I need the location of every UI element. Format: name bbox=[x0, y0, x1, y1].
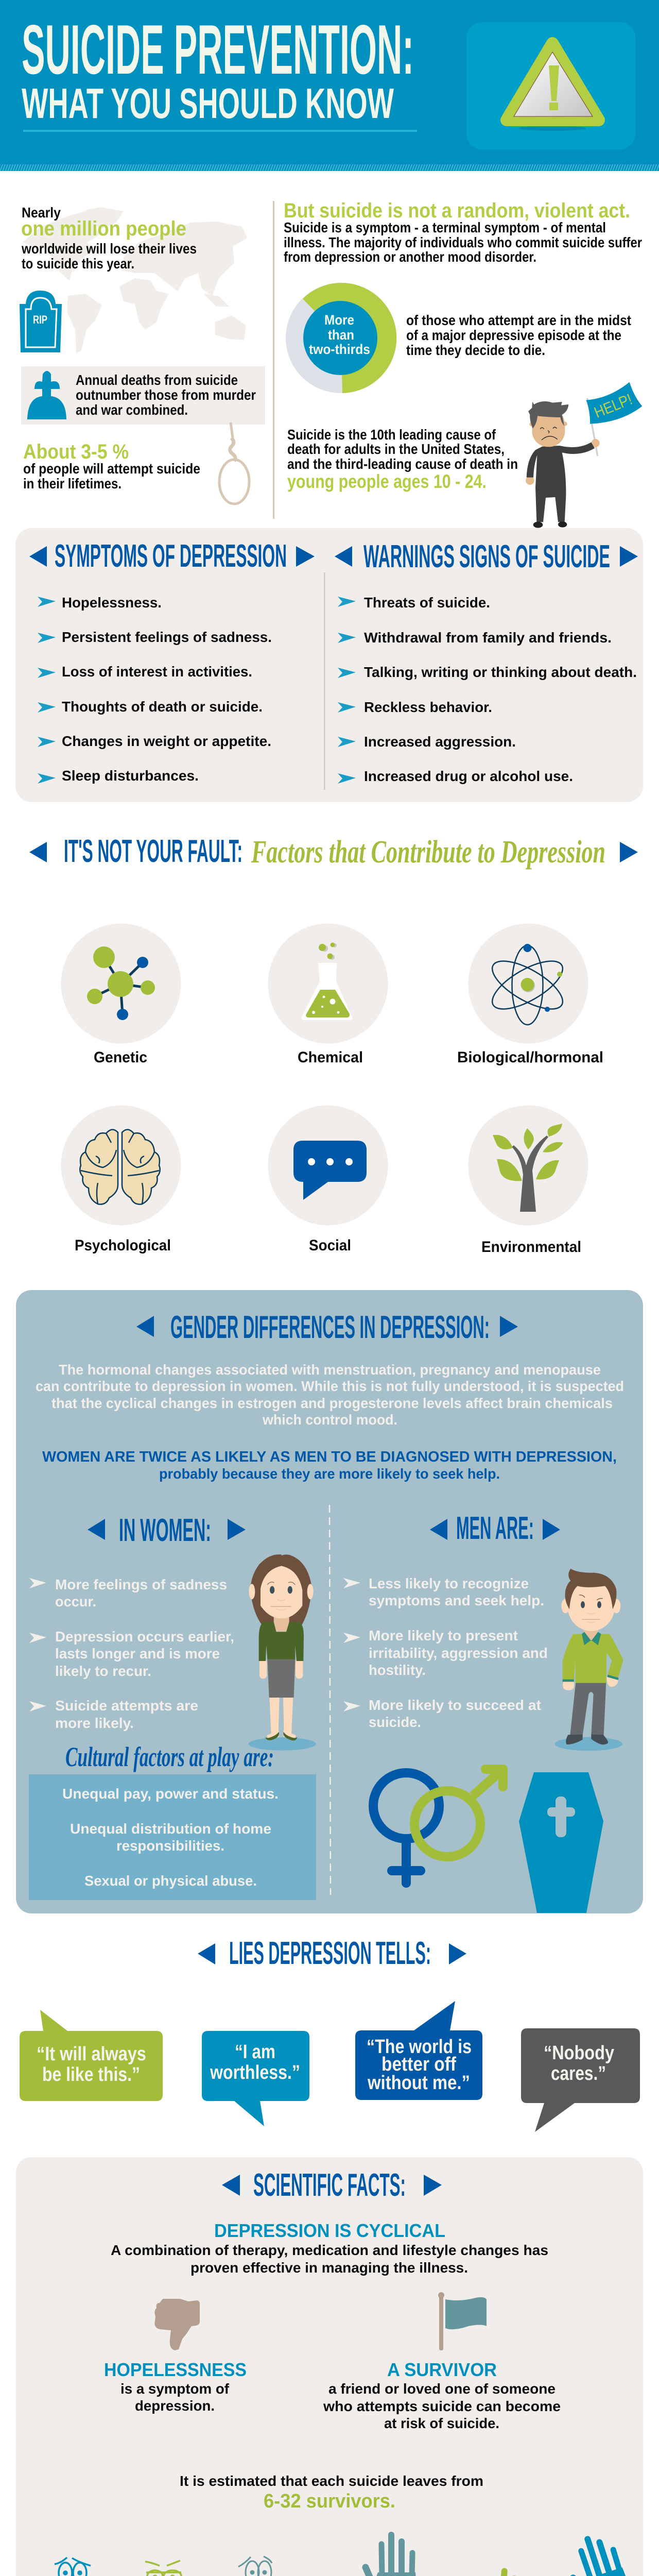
chart: donut more than two-thirds bbox=[286, 283, 396, 393]
text: of those who attempt: time they decide to die. bbox=[406, 342, 545, 358]
bubble: I am worthless: “I am bbox=[235, 2041, 275, 2063]
panel: symptoms and warning signs bbox=[15, 528, 643, 802]
bubble: it will always be like this: “It will always bbox=[37, 2043, 146, 2065]
icon: RIP tombstone: RIP bbox=[33, 313, 47, 326]
list: symptoms: Hopelessness. bbox=[62, 595, 162, 611]
text: hormonal changes: can contribute to depression in women. While this is not fully understood, it is suspected bbox=[36, 1378, 624, 1394]
box: cultural factors: Sexual or physical abuse. bbox=[84, 1873, 257, 1889]
text: about 3-5 percent: of people will attempt suicide bbox=[23, 461, 200, 477]
box: cultural factors: Unequal distribution of home bbox=[70, 1821, 271, 1837]
list: warning signs: Threats of suicide. bbox=[364, 595, 490, 611]
text: not a random act: from depression or another mood disorder. bbox=[284, 249, 536, 265]
factor: environmental bbox=[469, 1106, 588, 1256]
panel: scientific facts bbox=[16, 2157, 643, 2576]
title bbox=[22, 10, 417, 132]
list: symptoms: Thoughts of death or suicide. bbox=[62, 699, 263, 715]
header banner bbox=[0, 0, 659, 171]
icon: grave cross bbox=[27, 371, 66, 419]
factor: chemical bbox=[268, 923, 388, 1066]
text: a survivor bbox=[323, 2359, 561, 2431]
box: cultural factors: Unequal pay, power and status. bbox=[62, 1786, 279, 1802]
text: hopelessness: HOPELESSNESS bbox=[104, 2359, 247, 2380]
title: WHAT YOU SHOULD KNOW bbox=[22, 79, 394, 127]
list: in women: Suicide attempts are bbox=[55, 1698, 198, 1714]
heading: it's not your fault: IT'S NOT YOUR FAULT: bbox=[64, 834, 242, 869]
heading: scientific facts bbox=[222, 2167, 442, 2203]
list: in women: More feelings of sadness bbox=[55, 1577, 227, 1592]
text: hopelessness: is a symptom of bbox=[120, 2381, 230, 2397]
list: in women: occur. bbox=[55, 1594, 96, 1609]
heading: symptoms of depression bbox=[29, 538, 315, 574]
heading: symptoms of depression: SYMPTOMS OF DEPRESSION bbox=[55, 538, 287, 574]
bubble: the world is better off: without me.” bbox=[367, 2072, 470, 2094]
bubble: nobody cares bbox=[521, 2028, 640, 2132]
list: symptoms: Persistent feelings of sadness. bbox=[62, 629, 272, 645]
text: hormonal changes: which control mood. bbox=[262, 1412, 397, 1428]
list: symptoms bbox=[38, 595, 272, 784]
box: cultural factors: responsibilities. bbox=[116, 1838, 224, 1854]
text: depression is cyclical: DEPRESSION IS CYCLICAL bbox=[214, 2220, 445, 2241]
icon: RIP tombstone bbox=[20, 291, 62, 352]
list: men are: symptoms and seek help. bbox=[369, 1592, 544, 1608]
list: men are: More likely to present bbox=[369, 1628, 518, 1643]
text: 6-32 survivors: It is estimated that each suicide leaves from bbox=[180, 2473, 483, 2489]
text: of those who attempt: of a major depressive episode at the bbox=[406, 327, 621, 343]
list: men are: More likely to succeed at bbox=[369, 1697, 541, 1713]
list: warning signs: Increased drug or alcohol use. bbox=[364, 768, 573, 784]
factor: genetic: Genetic bbox=[94, 1049, 147, 1066]
text: one million people: to suicide this year. bbox=[22, 256, 134, 272]
factor: social: Social bbox=[309, 1237, 351, 1254]
list: men are: hostility. bbox=[369, 1662, 426, 1678]
illustration: man with help flag: HELP! bbox=[592, 391, 635, 421]
text: 10th leading cause: young people ages 10 - 24. bbox=[287, 471, 487, 492]
illustration: woman bbox=[249, 1554, 316, 1751]
chart: donut more than two-thirds: two-thirds bbox=[309, 342, 370, 357]
list: men are: irritability, aggression and bbox=[369, 1645, 548, 1661]
icon: brain bbox=[80, 1129, 160, 1205]
heading: men are: MEN ARE: bbox=[456, 1511, 534, 1546]
bubble: I am worthless: worthless.” bbox=[210, 2062, 300, 2083]
list: warning signs: Reckless behavior. bbox=[364, 699, 492, 715]
list: in women: likely to recur. bbox=[55, 1663, 151, 1679]
panel: annual deaths bbox=[21, 366, 265, 425]
heading: scientific facts: SCIENTIFIC FACTS: bbox=[253, 2167, 406, 2203]
text: about 3-5 percent: About 3-5 % bbox=[23, 440, 129, 463]
list: in women: lasts longer and is more bbox=[55, 1646, 220, 1662]
list: symptoms: Loss of interest in activities. bbox=[62, 664, 252, 680]
text: of those who attempt: of those who attempt are in the midst bbox=[406, 312, 631, 328]
panel: annual deaths: and war combined. bbox=[76, 402, 188, 418]
text: not a random act: Suicide is a symptom - a terminal symptom - of mental bbox=[284, 219, 606, 235]
factor: biological/hormonal bbox=[457, 923, 603, 1066]
factor: psychological: Psychological bbox=[75, 1237, 171, 1254]
text: women twice as likely bbox=[42, 1449, 617, 1482]
icon: coffin bbox=[519, 1772, 603, 1913]
list: in women: Depression occurs earlier, bbox=[55, 1629, 234, 1645]
text: of those who attempt bbox=[406, 312, 631, 358]
list: warning signs: Talking, writing or thinking about death. bbox=[364, 664, 637, 680]
text: 10th leading cause: Suicide is the 10th leading cause of bbox=[287, 427, 496, 443]
heading: gender differences bbox=[136, 1310, 518, 1345]
text: about 3-5 percent bbox=[23, 440, 200, 492]
icon: sad face bbox=[55, 2557, 91, 2576]
bubble: nobody cares: “Nobody bbox=[544, 2042, 614, 2064]
text: one million people: worldwide will lose their lives bbox=[21, 241, 197, 257]
text: 6-32 survivors bbox=[180, 2473, 483, 2512]
icon: gender symbols bbox=[373, 1769, 503, 1883]
bubble: it will always be like this bbox=[20, 2010, 163, 2101]
text: a survivor: a friend or loved one of someone bbox=[328, 2381, 556, 2397]
bubble: I am worthless bbox=[202, 2031, 309, 2126]
text: women twice as likely: WOMEN ARE TWICE AS LIKELY AS MEN TO BE DIAGNOSED WITH DEPRESSION, bbox=[42, 1449, 617, 1465]
text: 10th leading cause bbox=[287, 427, 518, 492]
heading: in women bbox=[88, 1513, 246, 1548]
chart: donut more than two-thirds: More bbox=[324, 312, 354, 328]
heading: men are bbox=[430, 1511, 560, 1546]
heading: cultural factors: Cultural factors at play are: bbox=[65, 1741, 274, 1772]
text: not a random act bbox=[284, 199, 642, 265]
icon: worried face bbox=[238, 2556, 272, 2576]
text: hormonal changes bbox=[36, 1362, 624, 1428]
hand teal tall bbox=[366, 2535, 416, 2576]
list: symptoms: Sleep disturbances. bbox=[62, 768, 199, 784]
bubble: it will always be like this: be like this.” bbox=[42, 2064, 140, 2086]
factor: chemical: Chemical bbox=[298, 1049, 363, 1066]
icon: noose bbox=[219, 422, 249, 504]
text: hormonal changes: that the cyclical changes in estrogen and progesterone levels affect brain chemicals bbox=[51, 1395, 613, 1411]
illustration: man bbox=[555, 1569, 623, 1751]
heading: lies depression tells bbox=[198, 1936, 466, 1971]
heading: lies depression tells: LIES DEPRESSION TELLS: bbox=[229, 1936, 431, 1971]
icon: thumbs down bbox=[154, 2299, 200, 2350]
bubble: the world is better off bbox=[355, 2001, 482, 2100]
box: cultural factors bbox=[29, 1774, 316, 1900]
heading: in women: IN WOMEN: bbox=[119, 1513, 211, 1548]
chart: donut more than two-thirds: than bbox=[328, 327, 354, 343]
list: men are bbox=[343, 1575, 548, 1730]
text: a survivor: A SURVIVOR bbox=[387, 2359, 497, 2380]
heading: it's not your fault bbox=[29, 834, 638, 870]
text: women twice as likely: probably because they are more likely to seek help. bbox=[159, 1466, 500, 1482]
text: 10th leading cause: death for adults in the United States, bbox=[287, 441, 505, 457]
text: a survivor: at risk of suicide. bbox=[384, 2415, 499, 2431]
panel: annual deaths: outnumber those from murder bbox=[76, 387, 256, 403]
text: depression is cyclical: proven effective in managing the illness. bbox=[190, 2260, 468, 2276]
illustration: man with help flag bbox=[526, 382, 642, 528]
list: in women bbox=[29, 1577, 234, 1731]
icon: survivor flag bbox=[438, 2292, 487, 2350]
text: a survivor: who attempts suicide can become bbox=[323, 2398, 561, 2414]
illustration: raised hands bbox=[317, 2532, 636, 2576]
text: depression is cyclical bbox=[111, 2220, 548, 2276]
text: about 3-5 percent: in their lifetimes. bbox=[23, 476, 122, 492]
icon: bored face bbox=[145, 2561, 181, 2576]
text: 10th leading cause: and the third-leading cause of death in bbox=[287, 456, 518, 472]
hand green tall bbox=[472, 2569, 529, 2576]
list: men are: Less likely to recognize bbox=[369, 1575, 529, 1591]
text: hormonal changes: The hormonal changes associated with menstruation, pregnancy and menopause bbox=[59, 1362, 601, 1378]
panel: gender differences bbox=[16, 1290, 643, 1913]
list: in women: more likely. bbox=[55, 1715, 134, 1731]
text: one million people: Nearly bbox=[22, 205, 61, 221]
list: warning signs bbox=[338, 595, 637, 784]
list: warning signs: Withdrawal from family and friends. bbox=[364, 630, 612, 646]
factor: psychological bbox=[61, 1106, 181, 1254]
text: one million people: one million people bbox=[21, 217, 186, 240]
list: men are: suicide. bbox=[369, 1714, 421, 1730]
factor: social bbox=[268, 1106, 388, 1254]
world map background bbox=[23, 207, 247, 353]
factor: genetic bbox=[61, 923, 181, 1066]
hand cyan tall bbox=[563, 2532, 636, 2576]
icon: warning triangle bbox=[466, 22, 635, 149]
text: one million people bbox=[21, 205, 197, 272]
factor: environmental: Environmental bbox=[481, 1239, 581, 1256]
factor: biological/hormonal: Biological/hormonal bbox=[457, 1049, 603, 1066]
text: 6-32 survivors: 6-32 survivors. bbox=[264, 2490, 395, 2512]
bubble: the world is better off: better off bbox=[381, 2054, 456, 2075]
bubble: the world is better off: “The world is bbox=[367, 2036, 472, 2058]
text: depression is cyclical: A combination of therapy, medication and lifestyle changes has bbox=[111, 2242, 548, 2258]
list: symptoms: Changes in weight or appetite. bbox=[62, 733, 271, 749]
bubble: nobody cares: cares.” bbox=[551, 2063, 606, 2084]
list: warning signs: Increased aggression. bbox=[364, 734, 516, 750]
text: hopelessness: depression. bbox=[135, 2398, 215, 2414]
text: hopelessness bbox=[104, 2359, 247, 2414]
panel: annual deaths: Annual deaths from suicide bbox=[76, 372, 238, 388]
